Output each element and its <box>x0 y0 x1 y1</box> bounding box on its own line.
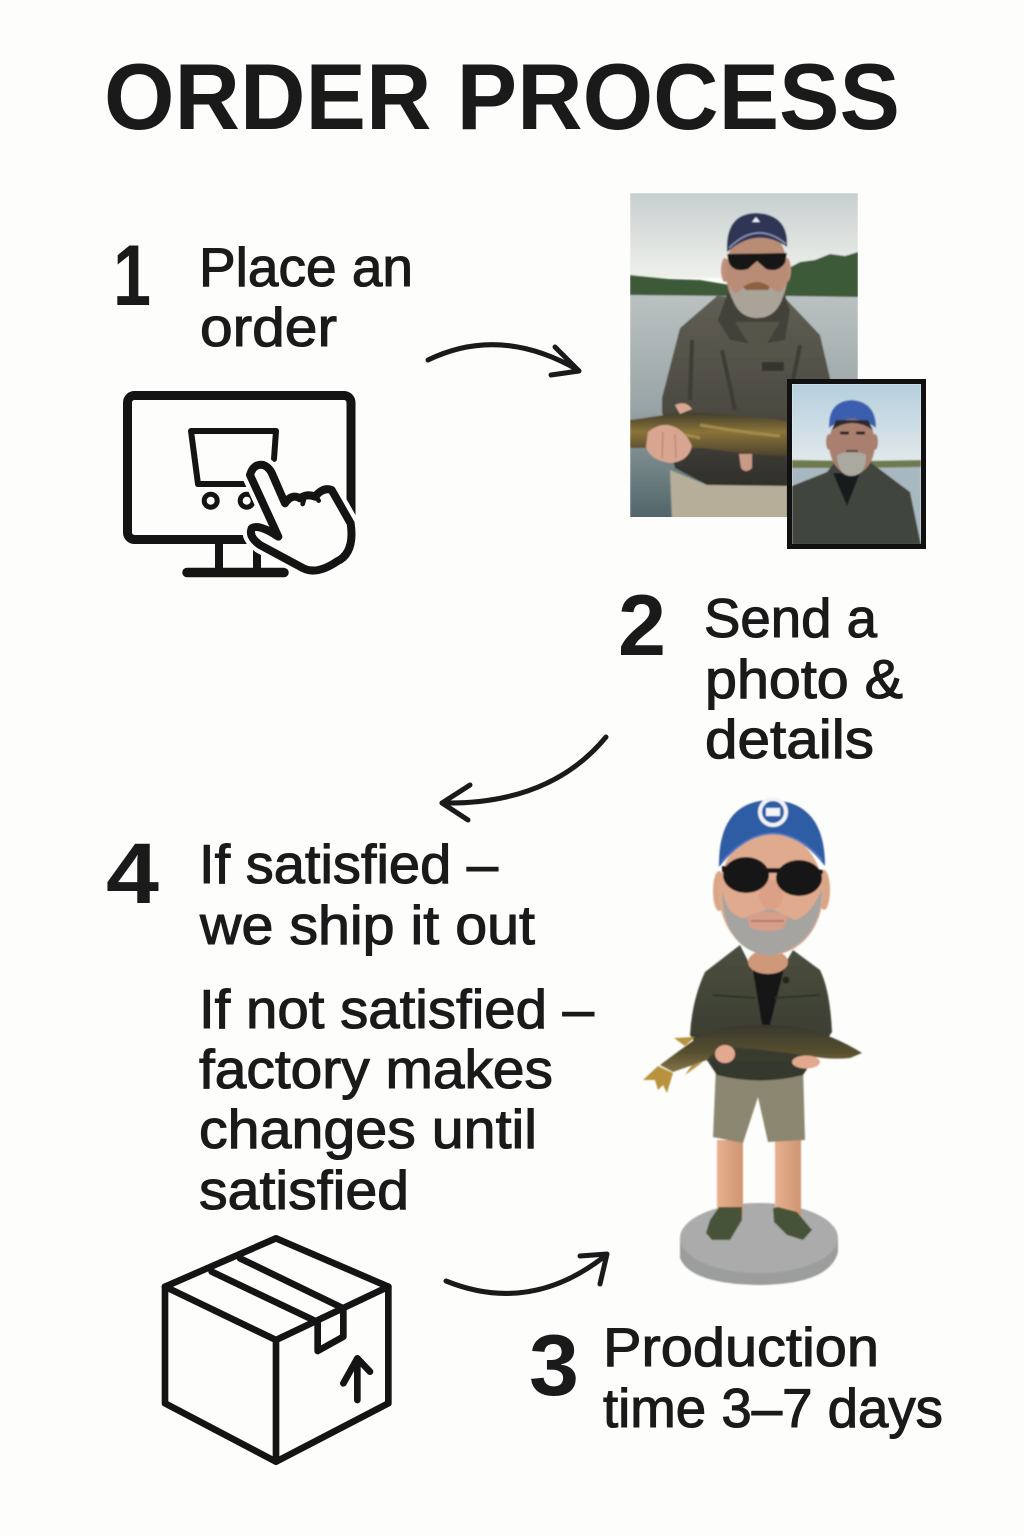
step 3: production time: Production <box>603 1316 879 1378</box>
step 2: send a photo and details: Send a <box>704 587 877 649</box>
step 4: satisfaction outcomes: If not satisfied – <box>199 978 594 1040</box>
step 4: satisfaction outcomes: factory makes <box>199 1038 553 1100</box>
step 2: send a photo and details <box>618 578 903 770</box>
step 4: satisfaction outcomes <box>106 826 594 1221</box>
arrow: step 4 to step 3 <box>446 1254 607 1293</box>
icon: monitor with shopping cart and pointing hand <box>128 396 351 572</box>
step 1: place an order: order <box>200 296 337 358</box>
step 4: satisfaction outcomes: we ship it out <box>199 894 535 956</box>
step 3: production time <box>529 1316 943 1439</box>
icon: shipping box <box>165 1238 388 1462</box>
step 4: satisfaction outcomes: If satisfied – <box>199 833 498 895</box>
step 3: production time: 3 <box>529 1318 579 1414</box>
photo: inset portrait with black frame <box>790 382 924 548</box>
step 4: satisfaction outcomes: changes until <box>199 1098 537 1160</box>
step 3: production time: time 3–7 days <box>603 1377 943 1439</box>
step 1: place an order: 1 <box>113 228 151 324</box>
step 4: satisfaction outcomes: 4 <box>106 826 159 922</box>
step 4: satisfaction outcomes: satisfied <box>199 1159 409 1221</box>
step 2: send a photo and details: details <box>705 708 874 770</box>
step 1: place an order <box>113 228 413 358</box>
arrow: step 1 to step 2 <box>428 345 579 375</box>
arrow: step 2 to step 4 <box>442 737 606 820</box>
step 2: send a photo and details: photo & <box>705 648 903 710</box>
photo: customer holding fish <box>630 193 858 520</box>
title: ORDER PROCESS <box>104 44 900 149</box>
bobblehead figurine holding fish <box>643 799 862 1285</box>
step 1: place an order: Place an <box>199 236 413 298</box>
step 2: send a photo and details: 2 <box>618 578 666 674</box>
